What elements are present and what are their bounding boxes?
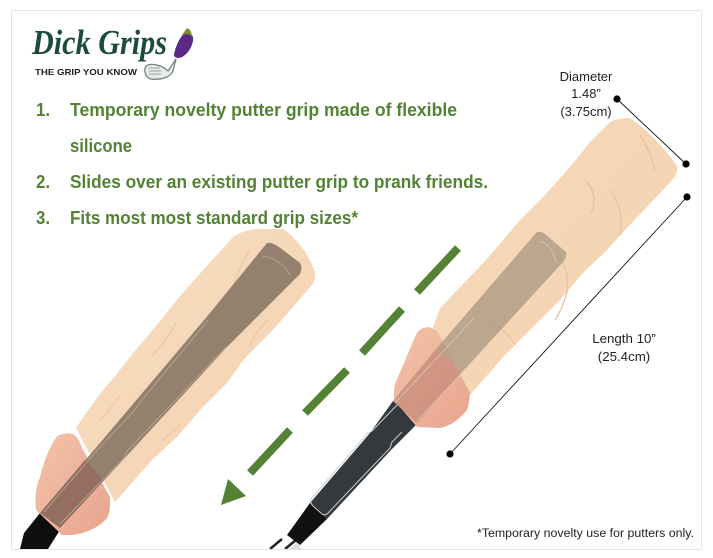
grip outline: [44, 256, 290, 524]
right sleeve sliding over grip: [270, 118, 677, 549]
putter shaft: [270, 539, 296, 549]
inner grip seen through sleeve: [40, 243, 302, 528]
diameter line: [617, 99, 686, 164]
inner grip seen through sleeve: [436, 232, 566, 372]
length measurement: [446, 193, 691, 458]
grip over flared end: [393, 349, 462, 423]
list item 3: 3.: [36, 208, 50, 228]
black putter grip: [287, 401, 418, 545]
length line: [450, 197, 687, 454]
list item 3: Fits most most standard grip sizes*: [70, 208, 358, 228]
length label: Length 10”: [592, 331, 656, 346]
dashed arrow line: [250, 248, 458, 473]
list item 2: 2.: [36, 172, 50, 192]
list item 1: [36, 100, 457, 156]
icon: eggplant: [174, 28, 193, 58]
list item 1: 1.: [36, 100, 50, 120]
logo tagline: THE GRIP YOU KNOW: [35, 68, 137, 77]
diameter measurement: [560, 69, 690, 168]
wrinkle texture: [100, 250, 268, 440]
list item 1: silicone: [70, 136, 132, 156]
left sleeve on grip: [20, 229, 315, 549]
grip outline: [396, 241, 556, 421]
icon: golf club head: [145, 59, 176, 79]
vein texture: [490, 135, 655, 345]
diameter label: 1.48”: [571, 86, 601, 101]
logo: [31, 23, 193, 79]
feature list: [36, 100, 488, 228]
length label: (25.4cm): [598, 349, 650, 364]
motion arrow: [221, 248, 458, 505]
sleeve flared end: [394, 327, 470, 428]
footnote: *Temporary novelty use for putters only.: [477, 528, 694, 540]
list item 1: Temporary novelty putter grip made of flexible: [70, 100, 457, 120]
sleeve body: [433, 118, 677, 395]
diameter label: (3.75cm): [560, 104, 612, 119]
grip trim outline: [311, 405, 402, 515]
sleeve flared end: [36, 433, 110, 535]
lower overlay tint: [40, 460, 104, 528]
diameter label: Diameter: [560, 69, 613, 84]
list item 2: Slides over an existing putter grip to prank friends.: [70, 172, 488, 192]
sleeve body: [76, 229, 315, 502]
putter shaft end: [20, 513, 60, 549]
logo wordmark: Dick Grips: [31, 23, 167, 62]
arrowhead: [221, 479, 246, 505]
